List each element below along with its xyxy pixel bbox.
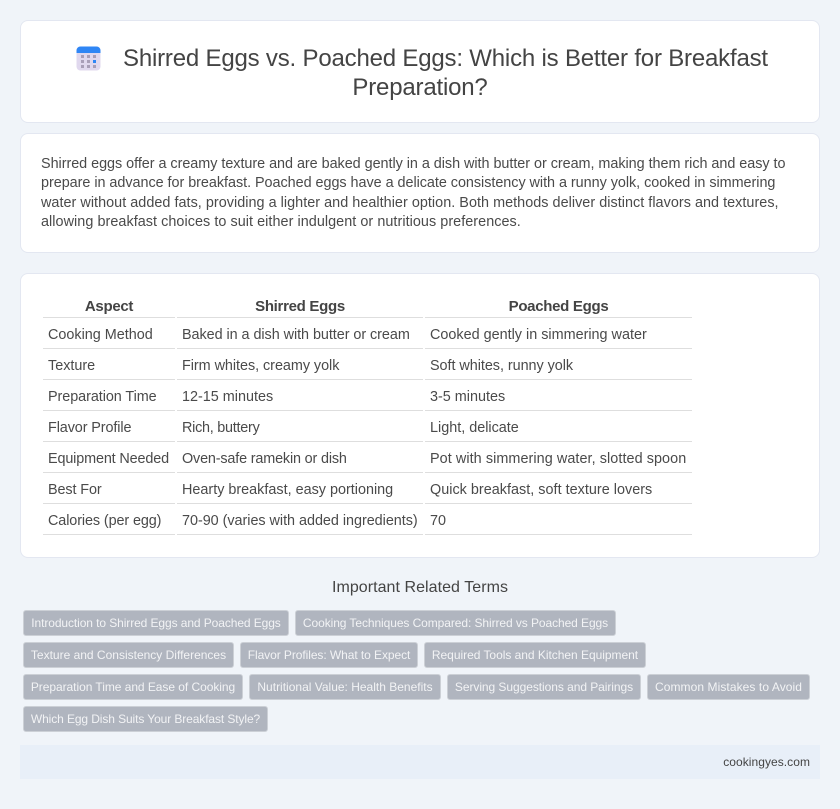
tag list: related terms: Nutritional Value: Health Benefits xyxy=(257,680,433,694)
text: description: allowing breakfast choices to suit either indulgent or nutritious preferences. xyxy=(41,214,521,230)
table: comparison: Cooked gently in simmering water xyxy=(430,327,647,343)
title: Preparation? xyxy=(352,74,488,101)
tag list: related terms xyxy=(23,610,810,732)
icon: calendar xyxy=(76,46,100,70)
text: description: water without added fats, providing a lighter and healthier option. Both methods deliver distinct flavors and textures, xyxy=(41,195,779,211)
table: comparison: Aspect xyxy=(85,298,133,315)
tag list: related terms: Flavor Profiles: What to Expect xyxy=(248,648,410,662)
table: comparison: Soft whites, runny yolk xyxy=(430,358,573,374)
tag list: related terms: Required Tools and Kitchen Equipment xyxy=(432,648,638,662)
table: comparison: 12-15 minutes xyxy=(182,389,273,405)
table: comparison: Rich, buttery xyxy=(182,420,260,436)
footer xyxy=(20,745,820,779)
table: comparison: Texture xyxy=(48,358,95,374)
title xyxy=(123,45,768,101)
panel: comparison table xyxy=(20,273,820,558)
table: comparison: Light, delicate xyxy=(430,420,519,436)
table: comparison: 3-5 minutes xyxy=(430,389,505,405)
table: comparison: Cooking Method xyxy=(48,327,153,343)
tag list: related terms: Texture and Consistency Differences xyxy=(31,648,226,662)
table: comparison: Pot with simmering water, slotted spoon xyxy=(430,451,686,467)
table: comparison: Firm whites, creamy yolk xyxy=(182,358,339,374)
table: comparison: Shirred Eggs xyxy=(255,298,345,315)
tag list: related terms: Cooking Techniques Compared: Shirred vs Poached Eggs xyxy=(303,616,608,630)
tag list: related terms: Introduction to Shirred Eggs and Poached Eggs xyxy=(31,616,281,630)
text: source: cookingyes.com xyxy=(723,755,810,769)
table: comparison: Oven-safe ramekin or dish xyxy=(182,451,347,467)
table: comparison: 70 xyxy=(430,513,446,529)
tag list: related terms: Preparation Time and Ease of Cooking xyxy=(31,680,235,694)
title: Shirred Eggs vs. Poached Eggs: Which is Better for Breakfast xyxy=(123,45,768,72)
tag list: related terms: Serving Suggestions and Pairings xyxy=(455,680,633,694)
table: comparison: Flavor Profile xyxy=(48,420,131,436)
table: comparison: Preparation Time xyxy=(48,389,157,405)
text: description: Shirred eggs offer a creamy texture and are baked gently in a dish with butter or cream, making them rich and easy to xyxy=(41,156,785,172)
heading: related terms: Important Related Terms xyxy=(332,579,508,596)
panel: description xyxy=(20,133,820,253)
tag list: related terms: Common Mistakes to Avoid xyxy=(655,680,802,694)
table: comparison: Quick breakfast, soft texture lovers xyxy=(430,482,652,498)
table: comparison: Equipment Needed xyxy=(48,451,169,467)
table: comparison: Hearty breakfast, easy portioning xyxy=(182,482,393,498)
table: comparison xyxy=(43,298,692,535)
panel: header xyxy=(20,20,820,123)
table: comparison: Calories (per egg) xyxy=(48,513,161,529)
table: comparison: Best For xyxy=(48,482,102,498)
text: description: prepare in advance for breakfast. Poached eggs have a delicate consistency with a runny yolk, cooked in simmering xyxy=(41,175,775,191)
table: comparison: Poached Eggs xyxy=(509,298,608,315)
text: description xyxy=(41,156,785,230)
table: comparison: 70-90 (varies with added ingredients) xyxy=(182,513,418,529)
table: comparison: Baked in a dish with butter or cream xyxy=(182,327,410,343)
tag list: related terms: Which Egg Dish Suits Your Breakfast Style? xyxy=(31,712,260,726)
